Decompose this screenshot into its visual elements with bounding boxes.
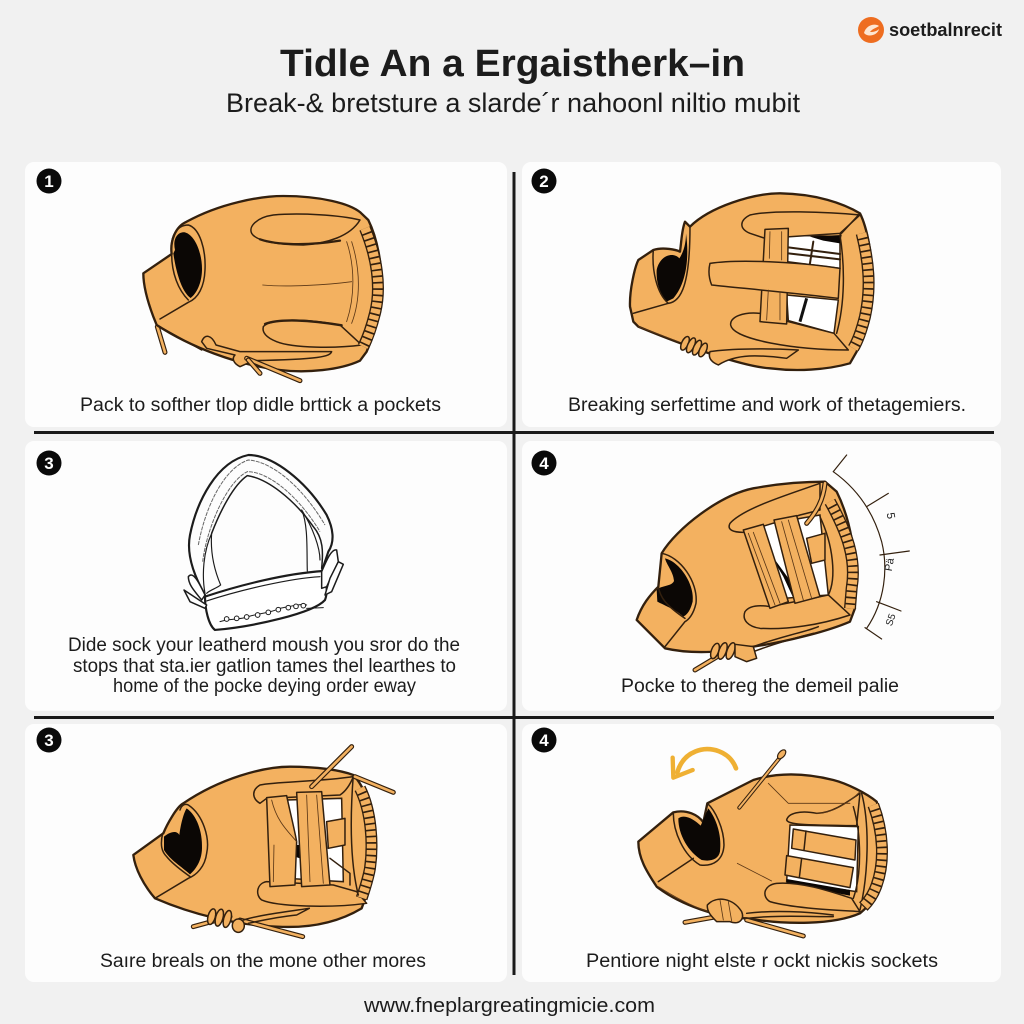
icon: tilted glove with arc gauge: Pä bbox=[883, 557, 897, 572]
step badge 1: 1 bbox=[44, 172, 54, 191]
icon: glove with yellow arrow bbox=[638, 748, 886, 936]
step badge 3: 3 bbox=[44, 454, 54, 473]
step badge 3 bbox=[36, 450, 62, 476]
step badge 4 (second): 4 bbox=[539, 731, 549, 750]
panel 1 bbox=[25, 162, 507, 427]
stitches bbox=[220, 603, 323, 622]
panel 6 bbox=[522, 724, 1001, 982]
panel 5 bbox=[25, 724, 507, 982]
logo bbox=[858, 17, 1002, 43]
caption 2: Breaking serfettime and work of thetagemiers. bbox=[568, 395, 966, 416]
icon: tilted glove with arc gauge: S5 bbox=[884, 612, 899, 628]
panel 3 bbox=[25, 441, 507, 711]
caption 1: Pack to softher tlop didle brttick a pockets bbox=[80, 395, 441, 416]
caption 5: Saıre breals on the mone other mores bbox=[100, 951, 426, 972]
step badge 4 (second) bbox=[532, 728, 556, 752]
step badge 1 bbox=[36, 168, 62, 194]
title: Tidle An a Ergaistherk–in bbox=[280, 43, 745, 85]
subtitle: Break-& bretsture a slarde´r nahoonl niltio mubit bbox=[226, 88, 800, 118]
caption 4: Pocke to thereg the demeil palie bbox=[621, 676, 899, 697]
icon: glove with laces through web bbox=[133, 747, 393, 937]
panel 4 bbox=[522, 441, 1001, 711]
step badge 3 (second) bbox=[36, 728, 62, 752]
caption 3: home of the pocke deying order eway bbox=[113, 676, 416, 697]
icon: tilted glove with arc gauge: 5 bbox=[884, 512, 897, 520]
icon: glove, closed pocket bbox=[143, 196, 381, 381]
logo: soetbalnrecit bbox=[889, 20, 1002, 40]
caption 6: Pentiore night elste r ockt nickis sockets bbox=[586, 951, 938, 972]
caption 3 bbox=[68, 635, 460, 697]
step badge 4 bbox=[532, 450, 556, 476]
arrow: curved yellow bbox=[673, 749, 736, 778]
caption 3: Dide sock your leatherd moush you sror do the bbox=[68, 635, 460, 656]
icon: glove with horizontal strap bbox=[630, 193, 872, 370]
icon: white strap loop bbox=[184, 455, 343, 630]
step badge 2: 2 bbox=[539, 172, 549, 191]
caption 3: stops that sta.ier gatlion tames thel learthes to bbox=[73, 656, 456, 677]
step badge 4: 4 bbox=[539, 454, 549, 473]
step badge 3 (second): 3 bbox=[44, 731, 54, 750]
footer url: www.fneplargreatingmicie.com bbox=[363, 995, 655, 1017]
step badge 2 bbox=[532, 168, 556, 194]
icon: tilted glove with arc gauge bbox=[637, 455, 909, 670]
panel 2 bbox=[522, 162, 1001, 427]
